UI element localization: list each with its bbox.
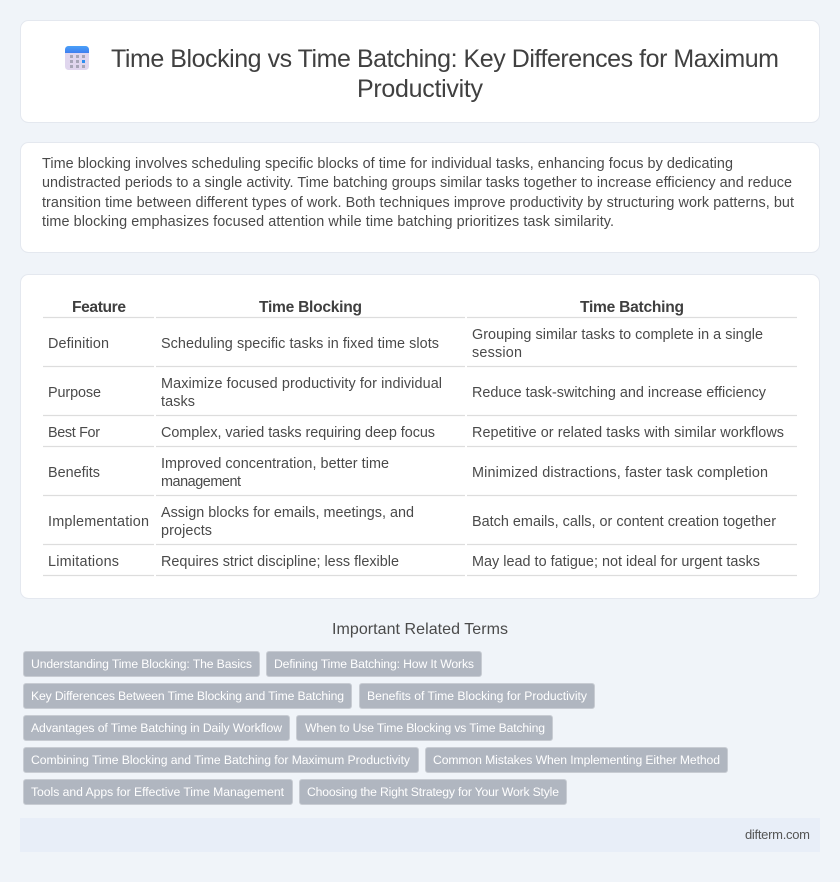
tag [24,748,418,772]
table row: best for: Best For [48,425,100,441]
tag: Common Mistakes When Implementing Either Method [433,753,720,767]
tag: Choosing the Right Strategy for Your Work Style [307,785,559,799]
tag: Benefits of Time Blocking for Productivity [367,689,588,703]
heading: important related terms: Important Related Terms [332,621,508,638]
tag [24,716,290,740]
tag [300,780,566,804]
table row: benefits: Minimized distractions, faster task completion [472,465,768,481]
panel: title header [20,20,820,122]
table row: purpose: Maximize focused productivity for individual [161,376,442,392]
table row: purpose: Purpose [48,385,101,401]
panel: introduction text: undistracted periods to a single activity. Time batching groups similar tasks together to increase efficiency and reduce [42,175,792,191]
tag [360,684,594,708]
table header row [43,299,797,318]
table row: definition [43,327,797,366]
related term tags [24,652,728,804]
panel: comparison table [20,274,820,598]
panel: introduction text: transition time between different types of work. Both techniques improve productivity by structuring work patterns, but [42,195,794,211]
table row: best for [43,425,797,446]
table row: definition: session [472,345,522,361]
table row: purpose: Reduce task-switching and increase efficiency [472,385,767,401]
table row: benefits [43,456,797,496]
tag: Key Differences Between Time Blocking and Time Batching [31,689,344,703]
table row: limitations: May lead to fatigue; not ideal for urgent tasks [472,554,760,570]
tag [24,780,292,804]
table row: benefits: Benefits [48,465,100,481]
table header row: Time Blocking [259,299,362,316]
heading: title [111,45,779,103]
table row: definition: Scheduling specific tasks in fixed time slots [161,336,439,352]
table row: best for: Repetitive or related tasks with similar workflows [472,425,784,441]
heading: title: Productivity [357,75,484,103]
tag: Tools and Apps for Effective Time Management [31,785,285,799]
panel: introduction text: time blocking emphasizes focused attention while time batching prioritizes task similarity. [42,214,614,230]
table row: implementation: projects [161,523,212,539]
tag [266,652,482,676]
table row: purpose: tasks [161,394,195,410]
panel: introduction text [20,142,820,252]
tag: Advantages of Time Batching in Daily Workflow [31,721,282,735]
tag: Combining Time Blocking and Time Batching for Maximum Productivity [31,753,411,767]
table row: implementation: Batch emails, calls, or content creation together [472,514,776,530]
panel: introduction text: Time blocking involves scheduling specific blocks of time for individual tasks, enhancing focus by dedicating [42,156,733,172]
table row: definition: Definition [48,336,109,352]
icon: calendar [65,46,89,70]
heading: title: Time Blocking vs Time Batching: Key Differences for Maximum [111,45,779,73]
table row: benefits: Improved concentration, better time [161,456,389,472]
table row: implementation [43,505,797,544]
table header row: Feature [72,299,126,316]
tag [296,716,552,740]
tag: When to Use Time Blocking vs Time Batching [305,721,545,735]
table header row: Time Batching [580,299,684,316]
table row: purpose [43,376,797,416]
footer [20,818,820,852]
table row: limitations: Requires strict discipline; less flexible [161,554,399,570]
table row: best for: Complex, varied tasks requiring deep focus [161,425,435,441]
table row: limitations: Limitations [48,554,119,570]
table row: implementation: Assign blocks for emails, meetings, and [161,505,414,521]
table row: implementation: Implementation [48,514,149,530]
tag [24,652,260,676]
table row: benefits: management [161,474,241,490]
table row: limitations [43,554,797,576]
tag [426,748,728,772]
footer: difterm.com [745,827,810,842]
table row: definition: Grouping similar tasks to complete in a single [472,327,763,343]
tag: Defining Time Batching: How It Works [274,657,474,671]
tag: Understanding Time Blocking: The Basics [31,657,252,671]
tag [24,684,352,708]
